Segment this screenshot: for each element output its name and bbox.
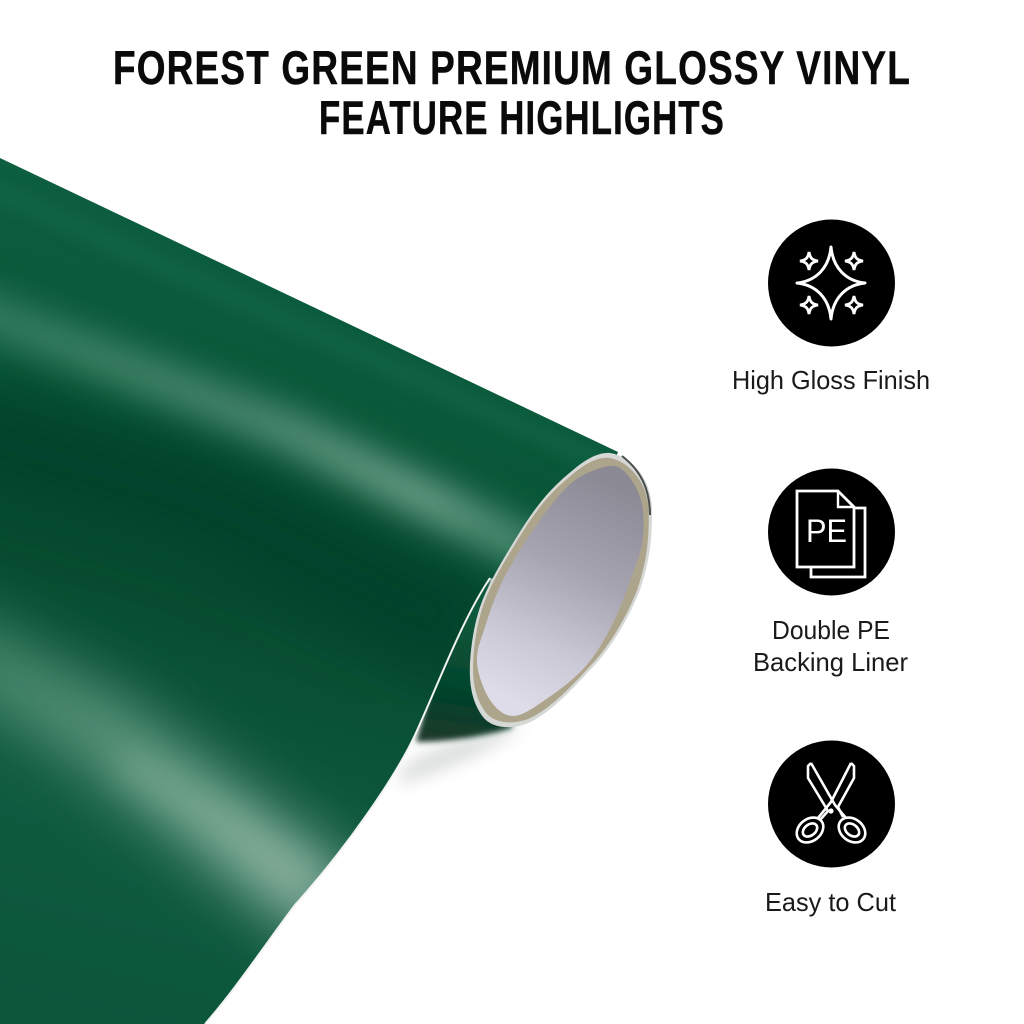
- vinyl roll: [0, 150, 660, 1024]
- cardboard ring: [473, 458, 649, 722]
- roll underside: [416, 570, 512, 742]
- icon: PE sheets: PE: [806, 513, 847, 549]
- label: Double PE: [772, 615, 890, 645]
- label: High Gloss Finish: [732, 365, 930, 395]
- title: [113, 41, 911, 144]
- icon: PE sheets: [768, 468, 895, 596]
- green sheet: [0, 150, 660, 1024]
- roll underside shadow: [400, 722, 525, 785]
- icon: sparkles: [768, 220, 895, 346]
- label: Easy to Cut: [765, 887, 897, 917]
- label: [753, 615, 908, 677]
- roll end: [470, 453, 652, 727]
- feature: high gloss finish: [732, 220, 930, 395]
- label: Backing Liner: [753, 647, 908, 677]
- core inside: [477, 466, 644, 716]
- feature: double PE backing liner: [753, 468, 908, 677]
- sheet edge highlight: [205, 578, 490, 1024]
- title: FEATURE HIGHLIGHTS: [319, 91, 725, 144]
- silver rim: [470, 453, 652, 727]
- dark rim arc: [622, 456, 650, 515]
- icon: scissors: [768, 740, 895, 868]
- feature: easy to cut: [765, 740, 897, 917]
